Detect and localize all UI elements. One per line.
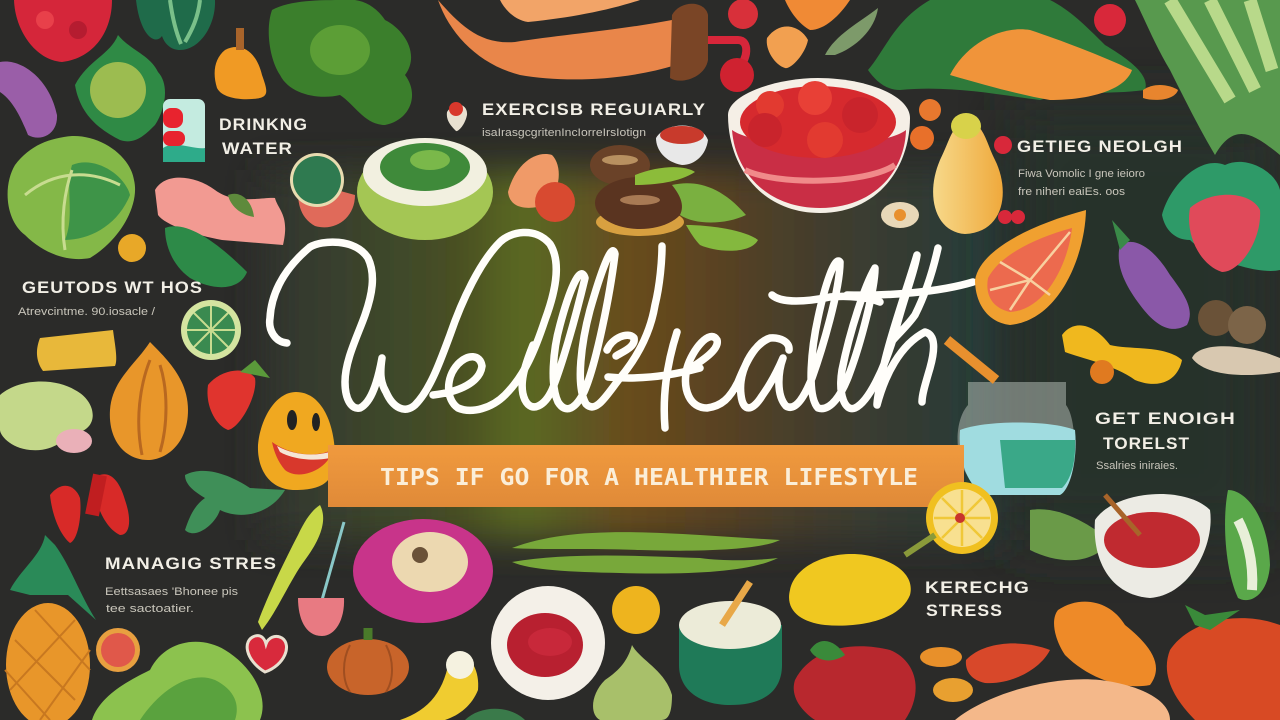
icon: salmon bbox=[155, 178, 285, 245]
icon: strawberry with leaves bbox=[1162, 162, 1280, 272]
icon: sweet potato bbox=[955, 679, 1170, 720]
icon: orange fruit bbox=[767, 0, 878, 68]
heading block: exercise regularly: isaIrasgcgritenIncIorreIrsIotign bbox=[482, 127, 646, 139]
icon: orange pumpkin bbox=[110, 342, 188, 460]
icon: big tomato bbox=[1167, 605, 1280, 720]
icon: lemon bbox=[612, 586, 660, 634]
heading block: managing stress: Eettsasaes 'Bhonee pis bbox=[105, 586, 239, 598]
icon: green pods bbox=[136, 0, 215, 50]
icon: small oranges and cherries bbox=[881, 99, 1025, 228]
icon: plate of berries bbox=[491, 586, 605, 700]
icon: lime cup bbox=[290, 153, 355, 227]
heading block: keeping stress bbox=[925, 578, 1030, 620]
icon: yellow melon bbox=[789, 535, 935, 626]
heading block: keeping stress: KERECHG bbox=[925, 578, 1030, 597]
icon: cucumber bbox=[165, 226, 247, 287]
icon: yellow pear bbox=[933, 113, 1003, 234]
icon: water bottle bbox=[163, 99, 205, 162]
icon: purple plate bbox=[353, 519, 493, 623]
icon: yellow pepper bbox=[1062, 325, 1182, 384]
icon: red chillies bbox=[50, 474, 129, 543]
heading block: get enough rest: Ssalries iniraies. bbox=[1096, 460, 1178, 472]
heading block: getting enough: fre niheri eaiEs. oos bbox=[1018, 186, 1126, 198]
icon: small strawberry bbox=[447, 102, 467, 131]
icon: red berries bbox=[794, 641, 916, 720]
heading block: getting enough: GETIEG NEOLGH bbox=[1017, 137, 1183, 156]
icon: banana bbox=[400, 651, 478, 720]
icon: pineapple bbox=[5, 535, 96, 720]
icon: red bowl of tomatoes bbox=[728, 78, 910, 213]
icon: pink turnip bbox=[56, 429, 92, 453]
icon: cauliflower bbox=[0, 382, 93, 450]
icon: onion bbox=[593, 645, 672, 720]
icon: big carrots bbox=[438, 0, 708, 81]
icon: strawberry bbox=[207, 360, 270, 430]
title: WellHealth script bbox=[270, 232, 973, 428]
icon: small carrot bbox=[1143, 85, 1178, 100]
icon: heart bbox=[247, 636, 287, 672]
icon: burgers bbox=[590, 145, 685, 236]
icon: smiling fruit emoji bbox=[258, 392, 335, 490]
icon: green pot drink bbox=[679, 582, 782, 705]
icon: parsley bbox=[269, 0, 412, 125]
icon: red hose and tomatoes bbox=[708, 0, 758, 92]
icon: green leaf bottom bbox=[465, 709, 525, 720]
heading block: get enough rest: TORELST bbox=[1103, 434, 1190, 453]
icon: water jar with brush bbox=[947, 340, 1076, 495]
heading block: getting enough bbox=[1017, 137, 1183, 198]
heading block: keeping stress: STRESS bbox=[926, 601, 1003, 620]
icon: red chilli bbox=[966, 643, 1050, 683]
icon: pink drink bbox=[298, 598, 344, 636]
icon: mushrooms bbox=[1192, 300, 1280, 375]
heading block: good foods: GEUTODS WT HOS bbox=[22, 278, 203, 297]
heading block: drinking water: WATER bbox=[222, 139, 293, 158]
icon: peach and tomato bbox=[508, 154, 575, 222]
icon: bok choy bbox=[1225, 490, 1270, 600]
icon: grapefruit wedge bbox=[975, 210, 1086, 325]
icon: small bowl bbox=[656, 126, 708, 165]
icon: spinach leaves bbox=[185, 471, 285, 533]
icon: burger leaves bbox=[635, 167, 758, 251]
icon: celery bbox=[1135, 0, 1280, 155]
icon: raspberry bbox=[14, 0, 112, 62]
icon: green beans bbox=[512, 532, 780, 574]
icon: pumpkin bbox=[327, 628, 409, 695]
heading block: managing stress: tee sactoatier. bbox=[106, 603, 194, 615]
icon: lemon slice bbox=[926, 482, 998, 554]
icon: small oranges bottom bbox=[920, 647, 973, 702]
icon: lettuce top bbox=[75, 35, 165, 141]
icon: purple yam bbox=[0, 62, 57, 138]
icon: orange bell pepper bbox=[215, 28, 266, 99]
icon: leek bbox=[258, 505, 344, 630]
heading block: good foods bbox=[18, 278, 203, 318]
heading block: good foods: Atrevcintme. 90.iosacle / bbox=[18, 306, 156, 318]
heading block: drinking water: DRINKNG bbox=[219, 115, 308, 134]
heading block: managing stress bbox=[105, 554, 277, 615]
heading block: get enough rest bbox=[1095, 409, 1236, 472]
heading block: get enough rest: GET ENOIGH bbox=[1095, 409, 1236, 428]
heading block: managing stress: MANAGIG STRES bbox=[105, 554, 277, 573]
icon: yellow blossom bbox=[118, 234, 146, 262]
banner: subtitle bbox=[328, 445, 964, 507]
icon: leafy greens bbox=[92, 642, 263, 720]
icon: big lettuce bbox=[8, 136, 135, 259]
icon: eggplant bbox=[1112, 220, 1190, 329]
heading block: exercise regularly bbox=[482, 100, 706, 139]
icon: kale and sweet potato bbox=[868, 0, 1146, 100]
banner: subtitle: TIPS IF GO FOR A HEALTHIER LIFESTYLE bbox=[380, 465, 918, 491]
icon: green salad bowl bbox=[357, 138, 493, 240]
heading block: drinking water bbox=[219, 115, 308, 158]
icon: orange squash bbox=[1054, 602, 1156, 686]
heading block: getting enough: Fiwa Vomolic I gne ieioro bbox=[1018, 168, 1145, 180]
heading block: exercise regularly: EXERCISB REGUIARLY bbox=[482, 100, 706, 119]
icon: small grapefruit bbox=[96, 628, 140, 672]
icon: cheese bbox=[37, 330, 116, 371]
icon: lime slice bbox=[181, 300, 241, 360]
icon: chili bowl with greens bbox=[1030, 494, 1211, 598]
